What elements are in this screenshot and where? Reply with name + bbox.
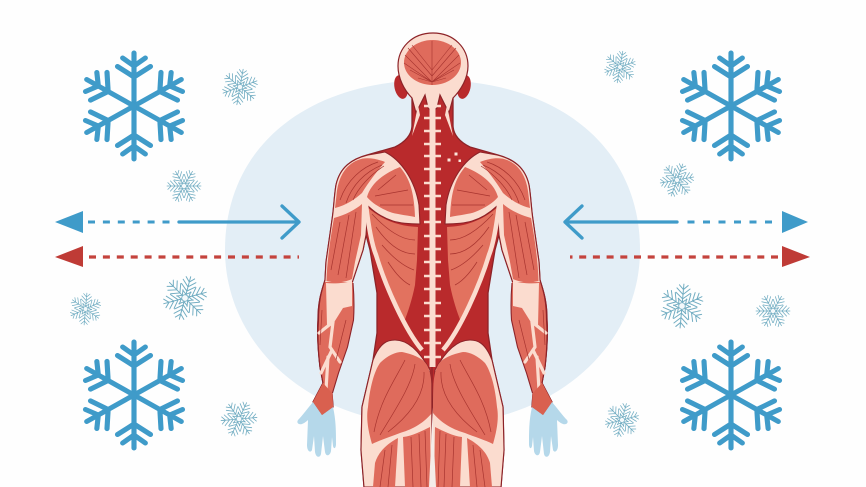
human body back view: [297, 33, 568, 487]
neck cream strips: [412, 105, 453, 136]
arrow: blue right pair: [565, 206, 808, 238]
central leg gap: [429, 414, 436, 487]
icon: large snowflake top left: [78, 53, 190, 159]
icon: large snowflake top right: [675, 53, 787, 159]
ears: [392, 74, 473, 100]
right half of body: [432, 92, 568, 487]
icon: large snowflake bottom left: [78, 342, 190, 448]
head muscle fibres: [404, 41, 460, 85]
spine: [424, 95, 441, 367]
head: [398, 33, 468, 113]
icon: small snowflake cluster: [68, 48, 797, 443]
arrow: red right: [570, 246, 810, 267]
pale blue circle: [225, 80, 640, 425]
left half of body: [297, 92, 433, 487]
icon: large snowflake bottom right: [675, 342, 787, 448]
head muscle: [404, 40, 461, 85]
small dots near shoulder: [448, 152, 461, 162]
arrow: red left: [55, 246, 299, 267]
arrow: blue left pair: [55, 206, 299, 238]
